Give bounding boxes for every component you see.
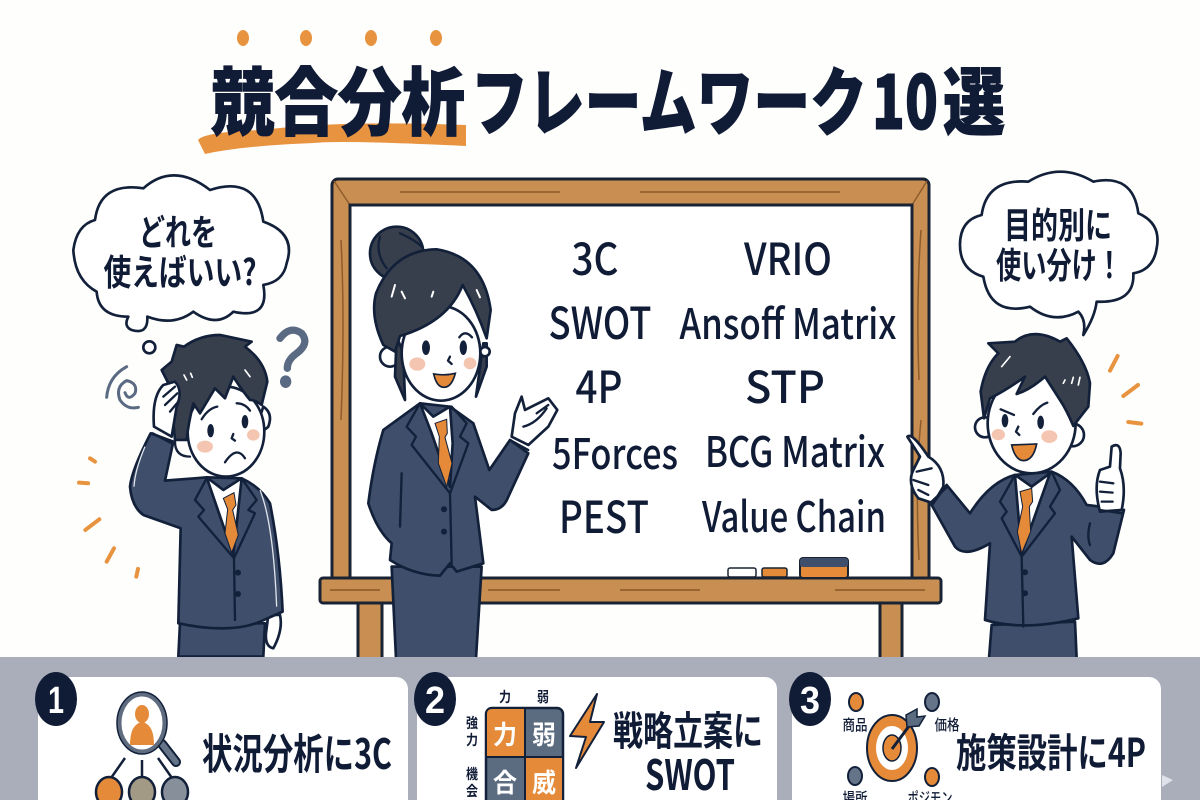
- speech bubble: left: どれを: [139, 204, 217, 256]
- title with highlight and emphasis dots: フレームワーク: [471, 44, 867, 151]
- badge 3: 3: [800, 680, 820, 722]
- icon: magnifier with three branches: [96, 692, 188, 800]
- icon: confused scribble: [107, 367, 138, 408]
- character: confident man: [907, 334, 1124, 658]
- badge 2: [414, 672, 456, 726]
- speech bubble: right: 使い分け！: [996, 237, 1122, 289]
- icon: SWOT matrix: 強: [466, 713, 478, 733]
- title with highlight and emphasis dots: 10: [872, 44, 938, 151]
- badge 2: 2: [425, 680, 445, 722]
- icon: target and 4P dots: 商品: [842, 714, 868, 735]
- icon: SWOT matrix: 弱: [537, 687, 549, 707]
- card 2: strategy planning: [414, 672, 777, 800]
- framework list on whiteboard: SWOT: [548, 288, 652, 352]
- badge 3: [789, 672, 831, 726]
- character: confused man: [130, 335, 283, 657]
- framework list on whiteboard: 3C: [572, 224, 618, 288]
- card 3 label: 施策設計に4P: [956, 721, 1146, 779]
- speech bubble: right: 目的別に: [1004, 197, 1112, 249]
- speech bubble: left: 使えばいい?: [104, 244, 256, 296]
- framework list on whiteboard: 4P: [576, 352, 622, 416]
- icon: SWOT matrix: 威: [532, 763, 556, 800]
- icon: SWOT matrix: 弱: [532, 715, 556, 752]
- title with highlight and emphasis dots: [198, 30, 1005, 154]
- card 2 label: 戦略立案に: [613, 699, 763, 757]
- icon: target and 4P dots: 価格: [934, 714, 960, 735]
- orange sparkle marks: [1110, 356, 1141, 424]
- framework list on whiteboard: VRIO: [743, 224, 832, 288]
- framework list on whiteboard: BCG Matrix: [705, 419, 885, 480]
- framework list on whiteboard: Ansoff Matrix: [680, 291, 896, 352]
- framework list on whiteboard: 5Forces: [552, 421, 678, 482]
- card 2 label: [613, 699, 763, 800]
- title with highlight and emphasis dots: 選: [943, 44, 1005, 151]
- badge 1: 1: [48, 680, 64, 722]
- tray items: chalk and eraser: [728, 558, 848, 578]
- icon: SWOT matrix: [466, 687, 563, 800]
- icon: SWOT matrix: 力: [499, 687, 511, 707]
- icon: lightning bolt: [570, 694, 604, 768]
- icon: question mark: [280, 330, 305, 388]
- icon: SWOT matrix: 機: [466, 764, 478, 784]
- next arrow: [1162, 775, 1173, 787]
- icon: SWOT matrix: 力: [466, 730, 478, 750]
- whiteboard: [320, 179, 941, 660]
- framework list on whiteboard: Value Chain: [701, 484, 886, 545]
- card 3: measures design: [789, 672, 1161, 800]
- card 1: situation analysis: [35, 672, 408, 800]
- framework list on whiteboard: [548, 224, 896, 546]
- speech bubble: right: [960, 172, 1158, 335]
- framework list on whiteboard: STP: [745, 352, 825, 416]
- orange stress marks: [79, 458, 138, 577]
- badge 1: [35, 672, 77, 726]
- title with highlight and emphasis dots: 競合分析: [211, 44, 465, 151]
- card 1 label: 状況分析に3C: [202, 721, 392, 782]
- icon: SWOT matrix: 力: [493, 715, 517, 752]
- icon: target and 4P dots: [842, 693, 960, 800]
- speech bubble: left: [73, 175, 289, 353]
- bottom band: [0, 657, 1200, 800]
- icon: SWOT matrix: 合: [493, 763, 517, 800]
- framework list on whiteboard: PEST: [559, 482, 649, 546]
- character: woman presenter: [368, 227, 557, 658]
